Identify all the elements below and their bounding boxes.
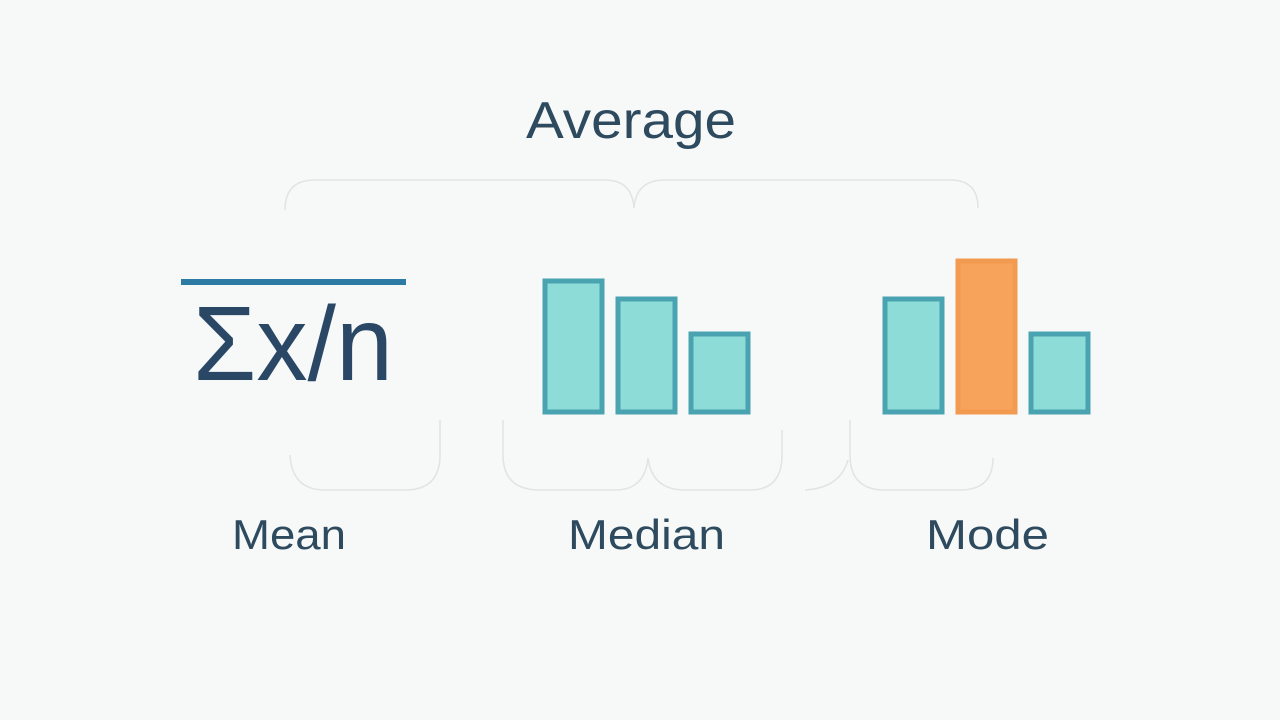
label: mode: Mode: [926, 511, 1049, 558]
mean formula: Σx/n: [193, 285, 393, 403]
mode bar chart: [885, 261, 1088, 412]
top bracket: [285, 180, 978, 210]
bottom brackets: [290, 420, 993, 490]
title: Average: [526, 92, 736, 150]
label: mean: Mean: [232, 511, 346, 558]
label: median: Median: [568, 511, 725, 558]
median bar chart: [545, 281, 748, 412]
